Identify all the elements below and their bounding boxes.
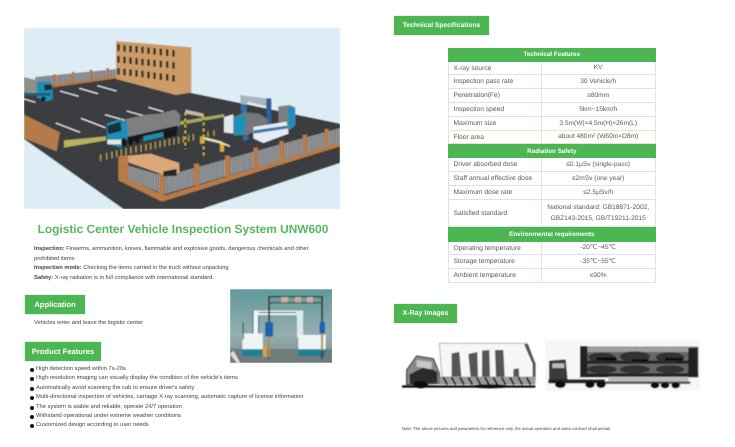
feature list: High detection speed within 7s-20s xyxy=(36,366,126,372)
heading: product features: Product Features xyxy=(32,347,94,356)
specifications table: Inspection speed xyxy=(454,106,504,113)
height gantry xyxy=(185,110,230,156)
specifications table: Technical Features xyxy=(524,51,580,58)
feature list xyxy=(30,366,304,428)
heading: x-ray images: X-Ray Images xyxy=(403,310,448,317)
specifications table: Storage temperature xyxy=(454,258,515,265)
intro text block: Inspection: Firearms, ammunition, knives, flammable and explosive goods, dangerous chemicals and other xyxy=(34,246,309,252)
feature list: High-resolution imaging can visually display the condition of the vehicle's items xyxy=(36,375,238,381)
specifications table: ≤0.1μSv (single-pass) xyxy=(566,161,630,168)
specifications table: X-ray source xyxy=(454,65,491,72)
building xyxy=(116,41,191,95)
specifications table: Operating temperature xyxy=(454,245,521,252)
specifications table: 30 Vehicle/h xyxy=(580,78,616,85)
intro text block xyxy=(34,246,309,280)
feature list: Customized design according to user needs xyxy=(36,422,149,428)
front fence xyxy=(159,128,340,202)
x-ray image: cargo truck xyxy=(401,342,536,390)
intro text block: prohibited items xyxy=(34,256,75,262)
specifications table: ≤2mSv (one year) xyxy=(572,175,624,182)
specifications table: -35℃~55℃ xyxy=(580,258,616,265)
specifications table: -20℃~45℃ xyxy=(580,244,616,251)
specifications table: Floor area xyxy=(454,134,484,141)
intro text block: Inspection mode: Checking the items carried in the truck without unpacking xyxy=(34,265,229,271)
heading: application: Application xyxy=(34,300,76,309)
parking lines xyxy=(24,86,163,133)
illustration: vehicle inspection site xyxy=(24,28,340,209)
heading: technical specifications: Technical Specifications xyxy=(403,22,480,29)
specifications table: ≤2.5μSv/h xyxy=(583,189,613,196)
specifications table: ≥80mm xyxy=(587,92,609,99)
photo: inspection gate xyxy=(230,289,332,363)
specifications table: Inspection pass rate xyxy=(454,78,513,85)
specifications table: National standard: GB18871-2002, xyxy=(547,204,649,211)
specifications table: Driver absorbed dose xyxy=(454,161,517,168)
specifications table: about 480m² (W60m×D8m) xyxy=(558,133,638,140)
x-ray image: car carrier truck xyxy=(546,340,700,390)
specifications table: Staff annual effective dose xyxy=(454,175,532,182)
title: Logistic Center Vehicle Inspection System UNW600 xyxy=(38,222,328,236)
specifications table: Penetration(Fe) xyxy=(454,92,500,99)
heading: product features xyxy=(25,342,101,361)
specifications table: Maximum dose rate xyxy=(454,189,512,196)
specifications table: GBZ143-2015, GB/T19211-2015 xyxy=(551,215,646,222)
specifications table xyxy=(448,48,656,283)
specifications table: Environmental requirements xyxy=(509,231,595,238)
specifications table: Satisfied standard xyxy=(454,210,507,217)
specifications table: Radiation Safety xyxy=(527,148,577,155)
specifications table: 3.5m(W)×4.5m(H)×26m(L) xyxy=(559,120,637,127)
specifications table: Maximum size xyxy=(454,120,496,127)
feature list: Automatically avoid scanning the cab to ensure driver's safety xyxy=(36,385,194,391)
feature list: The system is stable and reliable, operate 24/7 operation xyxy=(36,404,182,410)
road stripe xyxy=(64,137,106,148)
feature list: Multi-directional inspection of vehicles, carriage X-ray scanning, automatic capture of license information xyxy=(36,394,303,400)
truck: centre xyxy=(107,110,180,148)
left wall xyxy=(24,115,60,152)
heading: application xyxy=(25,295,85,314)
specifications table: ≤90% xyxy=(590,272,607,279)
application text: Vehicles enter and leave the logistic center xyxy=(34,320,143,326)
scanner gantry xyxy=(224,95,295,143)
intro text block: Safety: X-ray radiation is in full compliance with international standard. xyxy=(34,274,214,280)
specifications table: KV xyxy=(594,64,603,71)
heading: technical specifications xyxy=(394,16,489,35)
truck: upper left xyxy=(24,77,53,102)
yellow road dashes xyxy=(101,131,214,161)
heading: x-ray images xyxy=(394,304,457,323)
specifications table: 5km~15km/h xyxy=(579,106,617,113)
footnote: Note: The above pictures and parameters for reference only, the actual operation and sales contract shall prevail xyxy=(402,426,610,430)
specifications table: Ambient temperature xyxy=(454,272,516,279)
feature list: Withstand operational under extreme weather conditions xyxy=(36,413,181,419)
guard house xyxy=(118,154,179,202)
